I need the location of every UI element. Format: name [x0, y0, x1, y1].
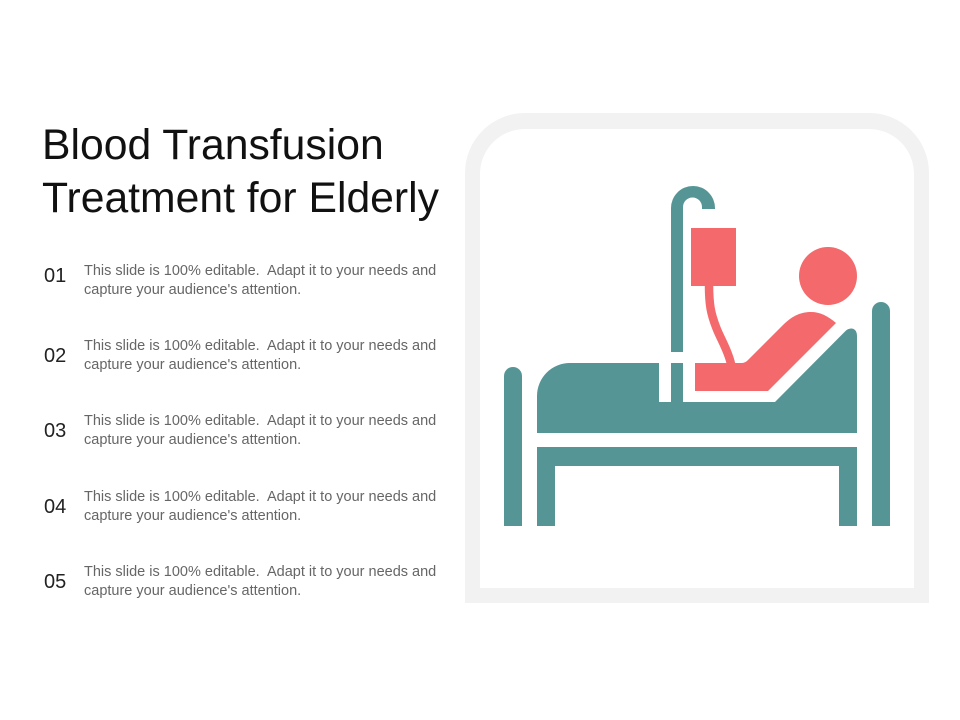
- patient head: [799, 247, 857, 305]
- number 02: 02: [44, 345, 66, 367]
- transfusion tube: [709, 285, 731, 364]
- title: Treatment for Elderly: [42, 174, 439, 222]
- rounded panel frame: [465, 113, 929, 603]
- list item 02: [44, 338, 436, 373]
- description 05: This slide is 100% editable. Adapt it to your needs and capture your audience's attention.: [84, 564, 436, 599]
- description 04: This slide is 100% editable. Adapt it to your needs and capture your audience's attention.: [84, 489, 436, 524]
- title: [42, 121, 439, 222]
- list item 04: [44, 489, 436, 524]
- number 03: 03: [44, 420, 66, 442]
- IV pole with hook: [671, 186, 715, 352]
- description 02: This slide is 100% editable. Adapt it to your needs and capture your audience's attention.: [84, 338, 436, 373]
- bed mattress: [537, 329, 857, 433]
- title: Blood Transfusion: [42, 121, 384, 169]
- description 03: This slide is 100% editable. Adapt it to your needs and capture your audience's attention.: [84, 413, 436, 448]
- number 04: 04: [44, 496, 66, 518]
- list item 03: [44, 413, 436, 448]
- blood bag: [691, 228, 736, 286]
- description 01: This slide is 100% editable. Adapt it to your needs and capture your audience's attention.: [84, 263, 436, 298]
- number 01: 01: [44, 265, 66, 287]
- icon: patient in hospital bed receiving transfusion: [504, 186, 890, 526]
- left bed rail: [504, 367, 522, 526]
- list item 01: [44, 263, 436, 298]
- list item 05: [44, 564, 436, 599]
- number 05: 05: [44, 571, 66, 593]
- bed frame: [537, 447, 857, 526]
- right bed rail: [872, 302, 890, 526]
- patient body: [695, 312, 836, 391]
